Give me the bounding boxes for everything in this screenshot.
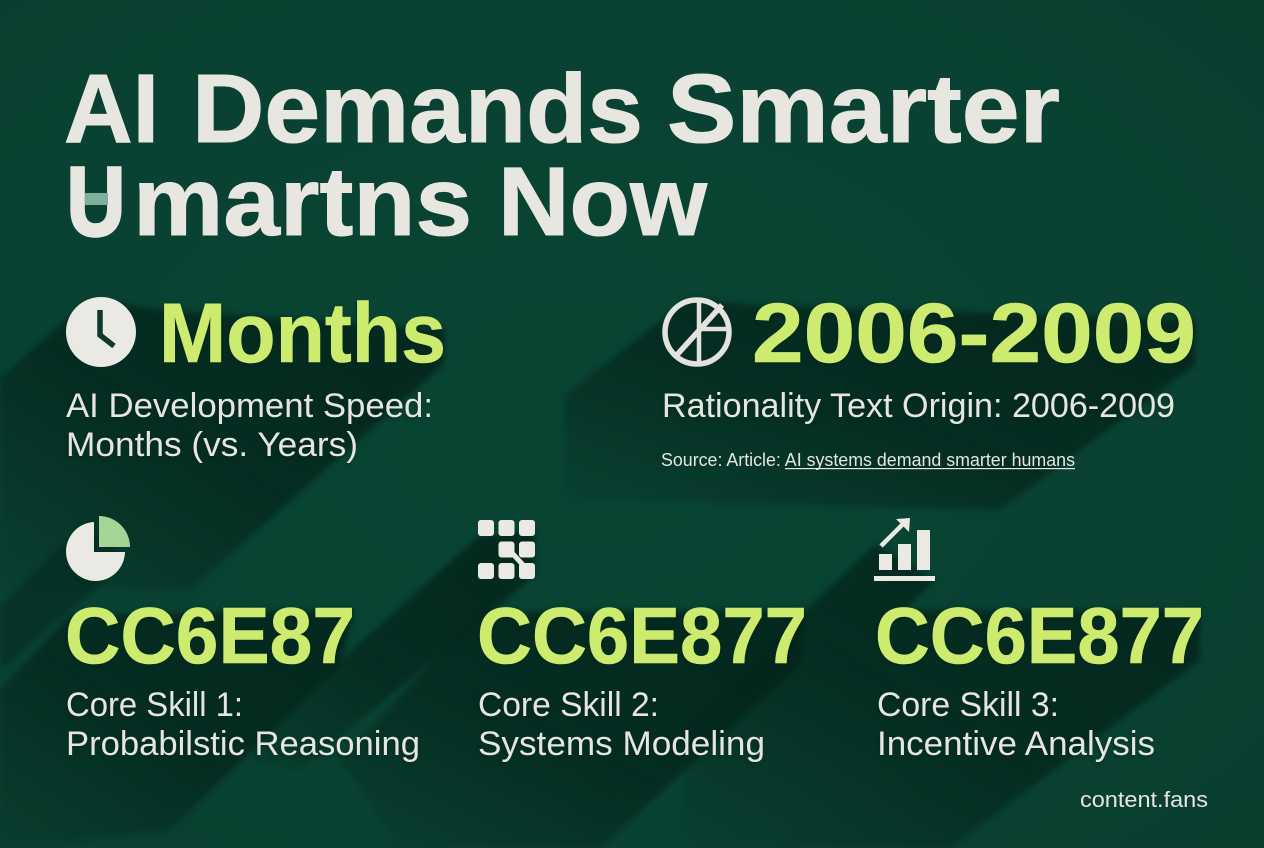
title: AI: [64, 54, 159, 163]
text: skill 1: Core Skill 1:: [66, 686, 243, 724]
title: Smarter: [667, 54, 1060, 163]
panel: AI development speed: [66, 286, 446, 464]
panel: core skill 2: [477, 520, 807, 763]
text: skill 2: Core Skill 2:: [478, 686, 659, 724]
text: speed description: Months (vs. Years): [66, 426, 358, 464]
stat: CC6E87: CC6E87: [65, 591, 355, 680]
text: skill 1: Probabilstic Reasoning: [66, 725, 420, 763]
stat: 2006-2009: 2006-2009: [752, 286, 1196, 380]
panel: core skill 1: [65, 516, 420, 763]
title: Demands: [192, 54, 643, 163]
text: skill 1: [66, 686, 420, 763]
icon: clock: [66, 297, 136, 367]
text: rationality origin: Rationality Text Origin: 2006-2009: [662, 387, 1175, 425]
title: Now: [498, 147, 708, 256]
text: skill 2: [478, 686, 765, 763]
icon: rising bar chart: [874, 518, 935, 581]
panel: rationality text origin: [661, 286, 1196, 470]
text: source link: Source: Article: AI systems demand smarter humans: [661, 450, 1075, 470]
icon: node grid: [478, 520, 535, 579]
brand: content.fans: content.fans: [1080, 787, 1208, 812]
icon: pie chart: [66, 516, 130, 581]
title: [64, 54, 1060, 256]
title: martns: [133, 147, 472, 256]
text: skill 2: Systems Modeling: [478, 725, 765, 763]
text: skill 3: Core Skill 3:: [877, 686, 1059, 724]
title: U: [67, 147, 125, 256]
text: skill 3: Incentive Analysis: [877, 725, 1155, 763]
stat: CC6E877 first: CC6E877: [477, 591, 807, 680]
icon: segmented wheel: [665, 300, 729, 364]
text: speed description: [66, 387, 433, 464]
long diagonal shadows: [0, 298, 1200, 848]
stat: Months: Months: [159, 286, 446, 380]
panel: core skill 3: [874, 518, 1204, 763]
stat: CC6E877 second: CC6E877: [875, 591, 1204, 680]
text: speed description: AI Development Speed:: [66, 387, 433, 425]
text: skill 3: [877, 686, 1155, 763]
